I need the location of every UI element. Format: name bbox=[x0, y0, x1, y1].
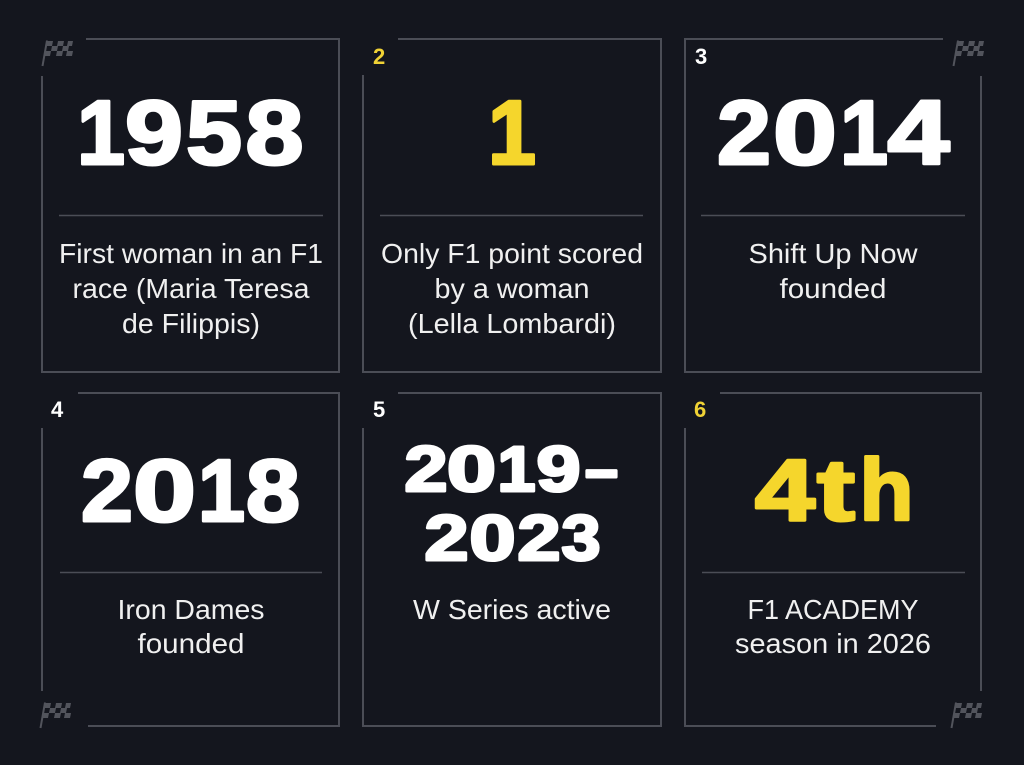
stat: 2018: 2 bbox=[81, 441, 133, 540]
stat: 2019–2023: 0 bbox=[470, 502, 516, 574]
panel: 1958 first woman in F1 bbox=[42, 39, 339, 372]
stat: 2018: 8 bbox=[246, 441, 300, 540]
stat: 1958: 9 bbox=[125, 83, 183, 184]
panel: W Series bbox=[363, 393, 661, 726]
panel: F1 Academy bbox=[685, 393, 982, 728]
stat: 2019–2023: 1 bbox=[498, 433, 536, 505]
description: only point: (Lella Lombardi) bbox=[408, 308, 616, 339]
description: F1 Academy: F1 ACADEMY bbox=[748, 594, 919, 625]
description: Shift Up Now: founded bbox=[780, 273, 886, 304]
description: Shift Up Now: Shift Up Now bbox=[748, 238, 918, 269]
stat: 2019–2023: 3 bbox=[562, 502, 600, 574]
panel: Iron Dames bbox=[40, 393, 339, 728]
stat: 4th: h bbox=[860, 442, 914, 539]
icon: checkered flag bottom right bbox=[952, 702, 982, 728]
stat: 2019–2023: 2 bbox=[404, 433, 448, 505]
stat: 2019–2023: 2 bbox=[424, 502, 468, 574]
icon: checkered flag bottom left bbox=[40, 702, 71, 728]
stat: 2018: 0 bbox=[133, 441, 196, 540]
stat: 1958: 8 bbox=[246, 83, 304, 184]
stat: 1: 1 bbox=[488, 83, 536, 184]
card number 6: 6 bbox=[694, 397, 706, 422]
card number 4: 4 bbox=[51, 397, 64, 422]
stat: 2014: 4 bbox=[888, 83, 950, 184]
stat: 2019–2023: 0 bbox=[447, 433, 496, 505]
card number 5: 5 bbox=[373, 397, 385, 422]
icon: checkered flag top right bbox=[954, 40, 984, 66]
stat: 2018: 1 bbox=[198, 441, 245, 540]
stat: 4th: t bbox=[817, 442, 855, 539]
stat: 2014: 1 bbox=[840, 83, 888, 184]
stat: 4th: 4 bbox=[755, 442, 815, 539]
stat: 1958: 1 bbox=[77, 83, 125, 184]
description: W Series: W Series active bbox=[413, 594, 611, 625]
description: only point: by a woman bbox=[434, 273, 590, 304]
panel: Shift Up Now bbox=[685, 39, 984, 372]
description: first woman: de Filippis) bbox=[122, 308, 260, 339]
description: first woman: race (Maria Teresa bbox=[72, 273, 310, 304]
icon: checkered flag top left bbox=[42, 40, 73, 66]
panel: only F1 point bbox=[363, 39, 661, 372]
stat: 2014: 2 bbox=[717, 83, 771, 184]
stat: 2014: 0 bbox=[773, 83, 837, 184]
description: Iron Dames: Iron Dames bbox=[118, 594, 264, 625]
description: first woman: First woman in an F1 bbox=[59, 238, 323, 269]
stat: 2019–2023: 2 bbox=[518, 502, 560, 574]
description: only point: Only F1 point scored bbox=[381, 238, 643, 269]
stat: 2019–2023: – bbox=[585, 433, 618, 505]
stat: 1958: 5 bbox=[186, 83, 242, 184]
description: Iron Dames: founded bbox=[138, 628, 244, 659]
card number 3: 3 bbox=[695, 44, 707, 69]
card number 2: 2 bbox=[373, 44, 385, 69]
stat: 2019–2023: 9 bbox=[536, 433, 580, 505]
description: F1 Academy: season in 2026 bbox=[735, 628, 931, 659]
